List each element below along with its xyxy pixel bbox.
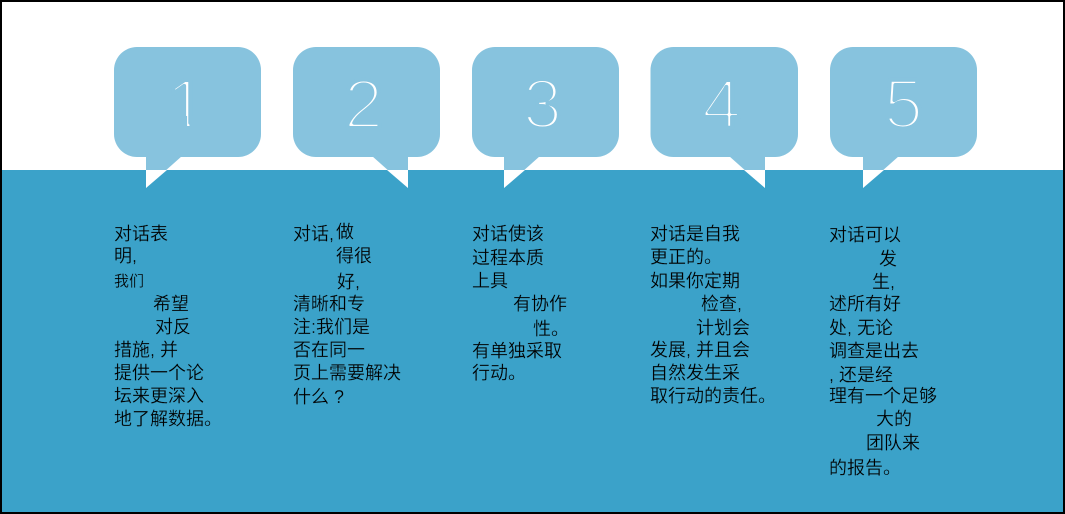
bubble 1 — [114, 47, 261, 188]
text block 1: 提供一个论 — [114, 363, 204, 383]
text block 1: 希望 — [153, 294, 189, 314]
text block 2: 好, — [337, 272, 360, 292]
text block 3: 对话使该 — [472, 224, 544, 244]
text block 3: 上具 — [472, 271, 508, 291]
bubble 2: 2 — [344, 65, 383, 143]
text block 5: 发 — [879, 249, 897, 269]
text block 4 — [650, 224, 776, 406]
text block 1: 明, — [114, 246, 137, 266]
text block 1: 地了解数据。 — [114, 409, 222, 429]
bubble 3 — [472, 47, 619, 188]
text block 2 — [293, 222, 401, 407]
text block 3: 行动。 — [472, 363, 526, 383]
text block 3: 有协作 — [513, 294, 567, 314]
text block 4: 自然发生采 — [650, 363, 740, 383]
text block 5: 调查是出去 — [829, 341, 919, 361]
text block 5: 生, — [872, 272, 895, 292]
text block 5: 的报告。 — [829, 458, 901, 478]
text block 2: 得很 — [336, 246, 372, 266]
text block 3: 性。 — [533, 319, 569, 339]
text block 1: 对话表 — [114, 224, 168, 244]
text block 3 — [472, 224, 569, 383]
text block 2: 注:我们是 — [293, 317, 370, 337]
bubble 4 — [650, 47, 798, 188]
text block 1 — [114, 224, 222, 429]
bubble 4: 4 — [702, 65, 741, 143]
text block 5: 处, 无论 — [829, 318, 893, 338]
bubble 5: 5 — [884, 65, 923, 143]
text block 2: 什么 ? — [293, 387, 344, 407]
text block 4: 对话是自我 — [650, 224, 740, 244]
text block 5: 团队来 — [866, 433, 920, 453]
text block 3: 过程本质 — [472, 248, 544, 268]
text block 4: 计划会 — [696, 318, 750, 338]
text block 3: 有单独采取 — [472, 341, 562, 361]
text block 1: 我们 — [114, 273, 144, 290]
bubble 3: 3 — [523, 65, 562, 143]
bubble 5 — [830, 47, 977, 188]
text block 5: 述所有好 — [829, 294, 901, 314]
text block 5 — [829, 225, 937, 478]
text block 5: , 还是经 — [829, 365, 893, 385]
text block 5: 大的 — [876, 409, 912, 429]
bubble 2 — [293, 47, 440, 188]
text block 4: 更正的。 — [650, 247, 722, 267]
text block 2: 页上需要解决 — [293, 363, 401, 383]
text block 5: 理有一个足够 — [829, 386, 937, 406]
text block 4: 检查, — [701, 294, 742, 314]
text block 5: 对话可以 — [829, 225, 901, 245]
text block 2: 清晰和专 — [293, 294, 365, 314]
text block 2: 否在同一 — [293, 340, 365, 360]
text block 1: 坛来更深入 — [114, 386, 204, 406]
text block 4: 取行动的责任。 — [650, 386, 776, 406]
text block 2: 对话, — [293, 224, 334, 244]
text block 4: 发展, 并且会 — [650, 340, 750, 360]
text block 1: 对反 — [155, 317, 191, 337]
text block 4: 如果你定期 — [650, 271, 740, 291]
text block 2: 做 — [336, 222, 354, 242]
text block 1: 措施, 并 — [114, 340, 178, 360]
bubble 1: 1 — [167, 65, 205, 143]
